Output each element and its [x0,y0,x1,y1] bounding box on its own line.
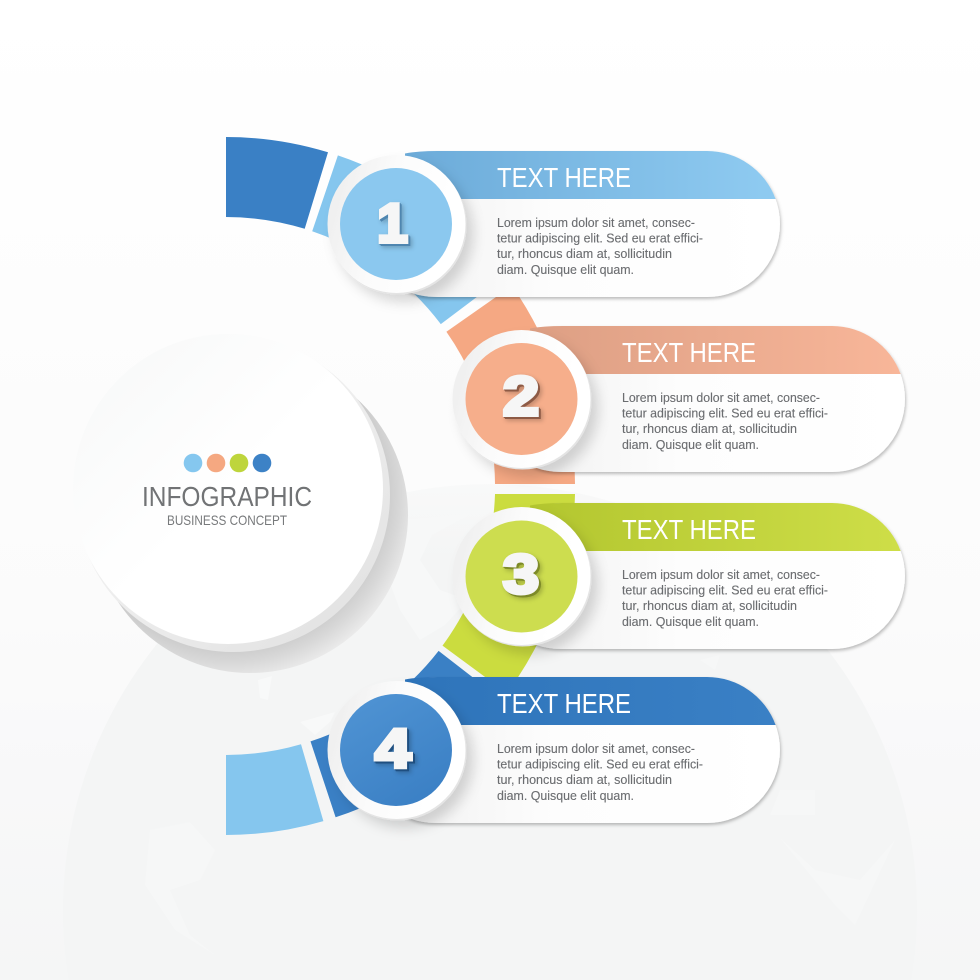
central subtitle: BUSINESS CONCEPT [167,512,287,528]
panel 3 ring [452,507,592,646]
panel 2 text: Lorem ipsum dolor sit amet, consec- [622,390,820,405]
panel 1 number disc [340,168,452,280]
panel 4 header band [405,677,776,725]
panel 2 text: diam. Quisque elit quam. [622,437,759,452]
panel 2 number disc [466,343,578,455]
panel 4 text: diam. Quisque elit quam. [497,788,634,803]
central circle shadow crescent [92,357,408,673]
central circle face [73,334,383,644]
panel 1 text: Lorem ipsum dolor sit amet, consec- [497,215,695,230]
panel 3 text: tur, rhoncus diam at, sollicitudin [622,598,797,613]
panel 2 text: tur, rhoncus diam at, sollicitudin [622,421,797,436]
central title: INFOGRAPHIC [142,481,312,512]
panel 4 [328,677,780,823]
panel 3 heading: TEXT HERE [622,514,756,545]
panel 4 text: tetur adipiscing elit. Sed eu erat effici- [497,756,703,772]
number 2: 2 [503,365,539,427]
panel 4 text: Lorem ipsum dolor sit amet, consec- [497,741,695,756]
panel 3 number disc [466,520,578,632]
panel 4 ring [328,681,466,820]
number 4: 4 [375,717,411,779]
panel 1 [328,151,780,297]
arc segment: light blue bottom [226,744,323,835]
arc segment: light blue [312,155,505,324]
panel 1 text: tetur adipiscing elit. Sed eu erat effici- [497,230,703,246]
panel 2 [452,326,905,472]
panel 1 body [405,151,780,297]
panel 1 ring [328,155,466,294]
arc segment: dark blue top [226,137,328,229]
panel 2 header band [530,326,901,374]
panel 3 text: tetur adipiscing elit. Sed eu erat effici- [622,582,828,598]
panel 4 text: tur, rhoncus diam at, sollicitudin [497,772,672,787]
panel 2 heading: TEXT HERE [622,337,756,368]
panel 3 text: diam. Quisque elit quam. [622,614,759,629]
panel 3 text: Lorem ipsum dolor sit amet, consec- [622,567,820,582]
panel 3 [452,503,905,649]
number 3: 3 [503,543,539,605]
panel 3 header band [530,503,901,551]
panel 2 text: tetur adipiscing elit. Sed eu erat effici- [622,406,828,420]
globe watermark [63,484,917,980]
panel 2 body [530,326,905,472]
central circle [73,334,408,673]
arc segment: green [442,494,575,693]
panel 2 ring [452,330,592,470]
colour dots [184,454,271,472]
panel 1 text: tur, rhoncus diam at, sollicitudin [497,246,672,261]
arc segment: orange [446,286,575,484]
panel 4 number disc [340,694,452,806]
panel 4 body [405,677,780,823]
panel 1 header band [405,151,776,199]
arc ring of four coloured segments [226,137,575,835]
panel 1 text: diam. Quisque elit quam. [497,262,634,277]
number 1: 1 [377,192,408,254]
panel 3 body [530,503,905,649]
panel 4 heading: TEXT HERE [497,688,631,719]
central circle edge [76,338,390,652]
arc segment: blue [310,651,502,817]
panel 1 heading: TEXT HERE [497,162,631,193]
